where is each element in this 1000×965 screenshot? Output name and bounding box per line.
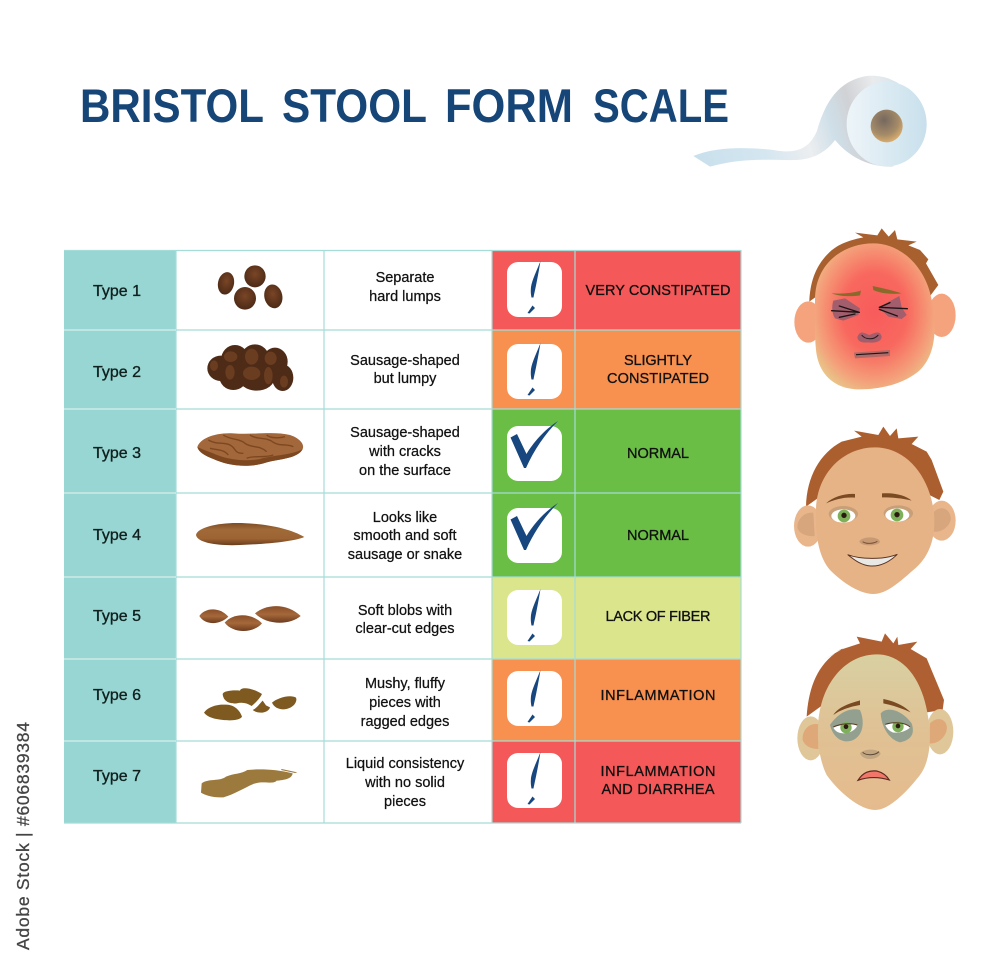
descriptions	[346, 270, 465, 810]
text: type 6: pieces with	[369, 695, 441, 711]
face: constipated	[794, 228, 956, 389]
icon: warning type 1	[507, 261, 562, 317]
title	[80, 79, 729, 132]
stool illustrations	[196, 265, 304, 797]
text: type 4: sausage or snake	[348, 547, 462, 563]
icon: type 4 smooth sausage	[196, 523, 304, 545]
text: type 5: Soft blobs with	[358, 603, 452, 619]
credit: Adobe Stock | #606839384	[13, 722, 33, 950]
status labels: LACK OF FIBER	[606, 609, 710, 625]
icon: warning type 6	[507, 670, 562, 726]
status labels: INFLAMMATION	[600, 688, 716, 704]
panel: status row lack of fiber	[492, 577, 741, 659]
text: type 6: ragged edges	[361, 714, 449, 730]
type labels	[93, 283, 141, 785]
type labels: Type 7	[93, 768, 141, 785]
panel: status row inflammation and diarrhea	[492, 741, 741, 823]
text: type 3: on the surface	[359, 463, 451, 479]
type labels: Type 6	[93, 687, 141, 704]
status icons	[507, 261, 562, 808]
status labels: AND DIARRHEA	[602, 782, 715, 798]
icon: check type 3	[507, 421, 562, 481]
type labels: Type 5	[93, 608, 141, 625]
text: type 4: Looks like	[373, 510, 437, 526]
panel: type column	[64, 250, 176, 823]
panel: status row slightly constipated	[492, 330, 741, 409]
text: type 7: Liquid consistency	[346, 756, 465, 772]
type labels: Type 1	[93, 283, 141, 300]
panel: status row very constipated	[492, 250, 741, 330]
title: BRISTOL	[80, 79, 264, 132]
type labels: Type 4	[93, 527, 141, 544]
text: type 6: Mushy, fluffy	[365, 676, 446, 692]
text: type 3: with cracks	[368, 444, 441, 460]
status labels: INFLAMMATION	[600, 764, 716, 780]
panel: status rows normal	[492, 409, 741, 577]
icon: warning type 2	[507, 343, 562, 399]
status labels: NORMAL	[627, 528, 689, 544]
text: type 1: Separate	[376, 270, 434, 286]
status labels: NORMAL	[627, 446, 689, 462]
status labels	[586, 283, 730, 798]
text: type 7: with no solid	[364, 775, 445, 791]
status labels: CONSTIPATED	[607, 371, 709, 387]
text: type 4: smooth and soft	[353, 528, 457, 544]
icon: type 5 soft blobs	[199, 606, 301, 631]
text: type 7: pieces	[384, 794, 426, 810]
title: STOOL	[282, 79, 427, 132]
text: type 5: clear-cut edges	[355, 621, 455, 637]
icon: type 1 lumps	[216, 265, 285, 310]
text: type 2: Sausage-shaped	[350, 353, 460, 369]
title: SCALE	[593, 79, 729, 132]
type labels: Type 3	[93, 445, 141, 462]
status labels: VERY CONSTIPATED	[586, 283, 730, 299]
icon: check type 4	[507, 503, 562, 563]
face: happy	[794, 427, 956, 594]
icon: type 7 liquid	[201, 769, 297, 797]
icon: warning type 7	[507, 752, 562, 808]
title: FORM	[445, 79, 573, 132]
text: type 1: hard lumps	[369, 289, 441, 305]
text: type 3: Sausage-shaped	[350, 425, 460, 441]
icon: warning type 5	[507, 589, 562, 645]
face: unwell	[797, 633, 953, 810]
text: type 2: but lumpy	[374, 371, 437, 387]
panel: status row inflammation	[492, 659, 741, 741]
icon: toilet paper roll	[693, 76, 927, 167]
icon: type 6 mushy pieces	[204, 688, 296, 720]
table	[64, 250, 741, 823]
status labels: SLIGHTLY	[624, 353, 692, 369]
type labels: Type 2	[93, 364, 141, 381]
icon: type 3 cracked sausage	[197, 433, 303, 466]
icon: type 2 lumpy sausage	[207, 344, 293, 391]
